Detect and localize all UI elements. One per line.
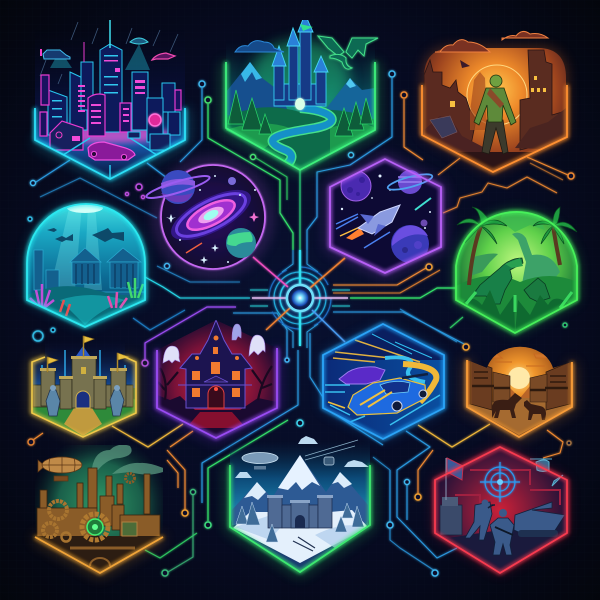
center energy core (250, 250, 350, 348)
western frame (467, 360, 572, 437)
racing scene (323, 324, 444, 439)
orange clouds (435, 31, 548, 52)
panel: haunted mansion (157, 320, 277, 440)
steampunk scene (35, 445, 163, 568)
airship, cable car and clouds (235, 436, 369, 478)
panel: wild west (465, 340, 575, 440)
panel: military combat (435, 447, 567, 575)
panel: galaxy (145, 163, 267, 271)
ringed planet (386, 170, 434, 194)
western scene (468, 346, 572, 436)
green planet (226, 177, 256, 258)
ghosts (163, 324, 265, 363)
circuit traces: orange (33, 99, 568, 510)
zombie scene (424, 48, 566, 168)
circuit traces: green (145, 104, 463, 572)
panel: steampunk factory (33, 445, 168, 575)
galaxy spiral (164, 180, 258, 250)
medieval scene (31, 346, 136, 436)
circuit traces: purple (145, 307, 236, 360)
panel: medieval castle (30, 336, 140, 440)
panel: jungle dinosaurs (450, 200, 580, 335)
flying vehicles and rain (40, 22, 178, 84)
panel: cyberpunk city (35, 20, 185, 180)
haunted frame (157, 348, 277, 438)
energy rays (252, 250, 348, 346)
military scene (435, 447, 567, 575)
snow scene (230, 440, 370, 572)
panel: racing cars (323, 324, 444, 439)
panel: snow mountains (230, 436, 370, 572)
zeppelin (38, 457, 82, 481)
panel: fantasy castle (226, 14, 378, 175)
space scene (330, 159, 441, 273)
flag and helicopter (446, 458, 563, 500)
underwater frame (27, 204, 145, 327)
rings and stepped traces (250, 250, 350, 348)
fantasy scene (226, 14, 376, 175)
ringed planet (145, 170, 211, 204)
circuit traces: gold (112, 424, 490, 447)
panel: rocket in space (330, 159, 441, 273)
dragon (318, 36, 378, 69)
zombie frame (422, 85, 567, 172)
galaxy body (161, 165, 265, 269)
jungle frame (456, 212, 577, 333)
haunted scene (157, 320, 277, 440)
jungle scene (456, 212, 576, 332)
military frame (435, 447, 567, 573)
cyberpunk frame (35, 108, 185, 179)
stars (166, 175, 259, 264)
racing frame (323, 324, 444, 439)
flag and cloud (235, 24, 313, 52)
snow frame (230, 465, 370, 572)
fantasy frame (226, 62, 375, 170)
steampunk frame (35, 537, 163, 573)
cyberpunk scene (35, 20, 185, 180)
circuit traces: blue (36, 78, 466, 571)
space frame (330, 159, 441, 273)
banners (47, 336, 129, 372)
panel: post-apocalyptic zombie (420, 31, 570, 175)
medieval frame (32, 357, 136, 437)
underwater scene (28, 204, 144, 326)
circuit nodes (28, 71, 574, 576)
panel: underwater ruins (25, 200, 147, 330)
palm trees (457, 207, 577, 285)
